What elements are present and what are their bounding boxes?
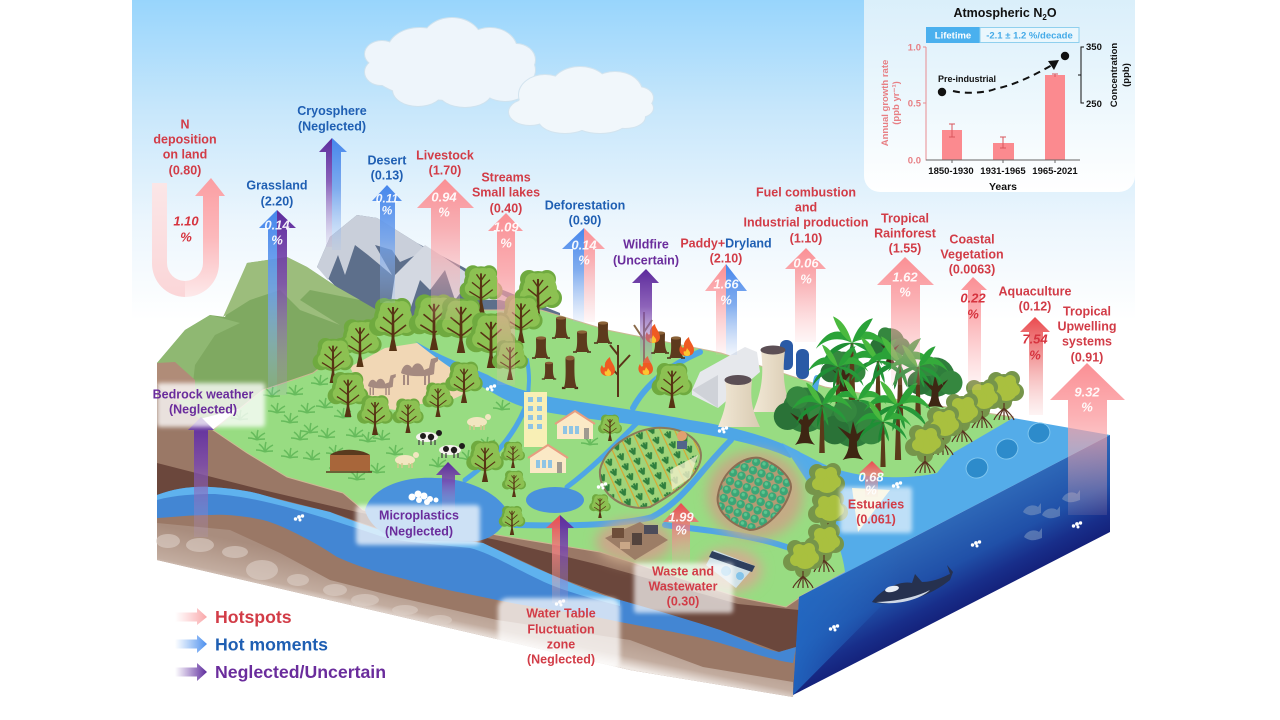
label: streams small lakes: Streams xyxy=(481,170,531,184)
pond large xyxy=(365,478,508,542)
percent: streams: % xyxy=(500,236,512,250)
buildings xyxy=(524,392,595,473)
label: tropical upwelling systems: Upwelling xyxy=(1057,320,1117,334)
label: tropical rainforest xyxy=(874,212,937,256)
percent: grassland: 0.14 xyxy=(264,218,290,232)
legend text: hot moments: Hot moments xyxy=(215,634,328,654)
label: estuaries: (0.061) xyxy=(856,512,896,526)
arrow: grassland xyxy=(259,210,296,395)
farm field paddy xyxy=(600,428,701,508)
percent: upwelling: % xyxy=(1081,400,1093,414)
left axis: 0.5 xyxy=(908,98,922,110)
percent: desert xyxy=(376,192,399,218)
percent: streams: 1.09 xyxy=(493,220,519,234)
label: water table: (Neglected) xyxy=(527,652,595,666)
label: waste and wastewater: (0.30) xyxy=(667,594,699,608)
fish school xyxy=(1023,490,1080,540)
label: bedrock weather: (Neglected) xyxy=(169,402,237,416)
label: paddy and dryland: (2.10) xyxy=(710,252,742,266)
earth cross-section xyxy=(156,385,799,697)
label: N deposition on land: on land xyxy=(163,148,207,162)
percent: desert: 0.11 xyxy=(376,192,399,206)
label: waste and wastewater: Wastewater xyxy=(648,580,718,594)
percent: coastal: % xyxy=(967,306,979,322)
label: paddy and dryland xyxy=(680,236,772,266)
arrow: tropical upwelling xyxy=(1050,363,1125,515)
arrow: bedrock weathering xyxy=(188,417,214,537)
sky background xyxy=(132,0,1135,320)
percent: deforestation: % xyxy=(578,252,590,268)
label: wildfire: (Uncertain) xyxy=(613,254,679,268)
label: aquaculture xyxy=(999,284,1072,314)
microplastics xyxy=(408,490,438,505)
lifetime box: -2.1 ± 1.2 %/decade xyxy=(986,30,1073,42)
year labels xyxy=(928,166,1078,193)
arrow: wildfire xyxy=(632,269,659,363)
arrow: deforestation xyxy=(562,228,605,322)
chart title: 2 xyxy=(1042,13,1047,22)
mangroves coast xyxy=(783,463,848,588)
farm field dryland xyxy=(707,451,803,539)
dark soil band xyxy=(157,463,799,652)
label: coastal vegetation: Vegetation xyxy=(940,248,1004,262)
percent: N deposition: 1.10 xyxy=(173,214,199,228)
label: deforestation: (0.90) xyxy=(569,214,601,228)
percent: estuaries: 0.68 xyxy=(858,470,884,484)
percent: rainforest: 1.62 xyxy=(892,270,918,284)
right axis: 350 xyxy=(1086,42,1102,53)
land surface xyxy=(213,310,1013,607)
main river xyxy=(415,341,800,458)
percent: upwelling xyxy=(1074,384,1100,414)
percent: aquaculture xyxy=(1022,332,1048,362)
label: N deposition on land: (0.80) xyxy=(169,164,201,178)
farm animals xyxy=(395,414,491,468)
arrow: water table xyxy=(546,515,574,603)
coastal water surface xyxy=(782,418,1110,597)
arrow: N deposition xyxy=(152,178,225,297)
lifetime box xyxy=(926,27,1079,43)
percent: rainforest xyxy=(892,270,918,300)
percent: estuaries: % xyxy=(865,482,877,498)
label: livestock xyxy=(416,148,474,178)
gravel bed xyxy=(157,523,793,697)
label: fuel combustion: Fuel combustion xyxy=(756,186,856,200)
percent: deforestation xyxy=(571,238,597,268)
gravel stones xyxy=(156,534,452,625)
cloud left xyxy=(365,18,535,107)
label: livestock: Livestock xyxy=(416,148,474,162)
N2O molecules xyxy=(294,384,1082,632)
percent: rainforest: % xyxy=(899,284,911,300)
left axis: (ppb yr⁻¹) xyxy=(891,81,902,125)
snow mountain xyxy=(317,215,560,340)
left axis: Annual growth rate xyxy=(880,60,891,146)
arrow: estuaries xyxy=(859,461,884,497)
percent: grassland xyxy=(264,218,290,248)
label: coastal vegetation: (0.0063) xyxy=(949,262,995,276)
label: N deposition on land xyxy=(153,118,217,178)
arrow: cryosphere xyxy=(319,138,347,250)
label: tropical rainforest: Tropical xyxy=(881,212,929,226)
percent: N deposition: % xyxy=(180,230,192,244)
arrow: aquaculture xyxy=(1020,317,1050,415)
green hills xyxy=(157,257,400,430)
groundwater highlight xyxy=(157,487,620,606)
label: streams small lakes: (0.40) xyxy=(490,202,522,216)
storage tanks xyxy=(780,340,809,379)
lifetime box: Lifetime xyxy=(935,30,971,42)
left axis xyxy=(880,42,1080,166)
mangroves shore xyxy=(905,371,1024,473)
percent: waste xyxy=(668,510,694,538)
power plant xyxy=(692,340,809,427)
arrow: microplastics xyxy=(436,462,461,510)
cooling tower large xyxy=(753,350,792,412)
legend arrow: hot moments xyxy=(175,635,207,653)
label: grassland: (2.20) xyxy=(261,194,293,208)
right axis xyxy=(1078,42,1132,110)
arrow: livestock xyxy=(417,179,474,320)
arrow: waste and wastewater xyxy=(663,503,699,567)
concentration trend xyxy=(938,52,1069,96)
right axis: Concentration xyxy=(1109,43,1120,107)
label: paddy and dryland: Paddy+Dryland xyxy=(680,236,772,250)
label: desert: (0.13) xyxy=(371,168,403,182)
label: livestock: (1.70) xyxy=(429,164,461,178)
year labels: 1965-2021 xyxy=(1032,166,1078,177)
label: fuel combustion: and xyxy=(795,200,817,214)
arrow: fuel combustion xyxy=(785,248,826,342)
label: grassland xyxy=(246,178,308,208)
percentages on arrows xyxy=(173,190,1100,538)
label: bedrock weather xyxy=(153,388,254,416)
label: tropical upwelling systems: (0.91) xyxy=(1071,350,1103,364)
year labels: Years xyxy=(989,181,1017,193)
label: aquaculture: (0.12) xyxy=(1019,300,1051,314)
soil base xyxy=(157,385,799,697)
percent: waste: 1.99 xyxy=(668,510,694,524)
arrow: coastal vegetation xyxy=(961,277,987,390)
label: aquaculture: Aquaculture xyxy=(999,284,1072,298)
chart title: Atmospheric N xyxy=(953,6,1042,20)
percent: paddy: % xyxy=(720,292,732,308)
label: estuaries xyxy=(848,498,904,526)
concentration trend: Pre-industrial xyxy=(938,74,996,84)
wastewater treatment plant xyxy=(698,548,762,592)
legend text: hotspots: Hotspots xyxy=(215,607,292,627)
label: water table: zone xyxy=(547,638,575,652)
label: N deposition on land: deposition xyxy=(153,132,217,146)
label backing panels xyxy=(157,383,912,670)
arrow: paddy and dryland xyxy=(705,264,747,355)
percent: streams xyxy=(493,220,519,250)
legend arrow: hotspots xyxy=(175,608,207,625)
compost pile xyxy=(326,450,372,472)
arrow: tropical rainforest xyxy=(877,257,934,385)
percent: fuel: % xyxy=(800,272,812,286)
label: desert: Desert xyxy=(368,154,407,168)
percent: aquaculture: 7.54 xyxy=(1022,332,1048,346)
legend xyxy=(175,607,386,682)
label: tropical upwelling systems: systems xyxy=(1062,334,1112,348)
percent: livestock: 0.94 xyxy=(431,190,457,204)
label: tropical rainforest: Rainforest xyxy=(874,226,937,240)
label: tropical upwelling systems xyxy=(1057,304,1117,364)
percent: paddy: 1.66 xyxy=(713,276,739,292)
percent: coastal: 0.22 xyxy=(960,290,986,306)
label: cryosphere xyxy=(297,104,367,134)
percent: desert: % xyxy=(382,204,393,218)
label: grassland: Grassland xyxy=(246,178,308,192)
percent: coastal xyxy=(960,290,986,322)
left axis: 1.0 xyxy=(908,42,921,54)
label: deforestation xyxy=(545,198,625,228)
groundwater band xyxy=(157,487,796,663)
percent: livestock xyxy=(431,190,457,220)
left axis: 0.0 xyxy=(908,156,921,166)
waste plant xyxy=(596,520,672,564)
label: deforestation: Deforestation xyxy=(545,198,625,212)
percent: grassland: % xyxy=(271,232,283,248)
label: tropical rainforest: (1.55) xyxy=(889,242,921,256)
cooling tower small xyxy=(718,380,760,427)
label: microplastics: Microplastics xyxy=(379,508,459,522)
label: microplastics: (Neglected) xyxy=(385,524,453,538)
label: water table xyxy=(526,606,596,666)
label: streams small lakes xyxy=(472,170,540,216)
right axis: (ppb) xyxy=(1121,63,1132,87)
label: fuel combustion: (1.10) xyxy=(790,232,822,246)
orca xyxy=(872,565,953,603)
aquaculture ponds xyxy=(963,420,1053,481)
label: waste and wastewater: Waste and xyxy=(652,564,714,578)
desert sand patch xyxy=(350,343,470,410)
grass tufts xyxy=(231,375,598,480)
label: fuel combustion xyxy=(744,186,868,246)
label: tropical upwelling systems: Tropical xyxy=(1063,304,1111,318)
rivers and ponds xyxy=(365,341,822,550)
label: N deposition on land: N xyxy=(180,118,190,132)
ocean front face xyxy=(793,435,1110,695)
pond small xyxy=(526,487,584,513)
legend text: neglected: Neglected/Uncertain xyxy=(215,662,386,682)
wildfire dead trees xyxy=(606,312,652,397)
percent: upwelling: 9.32 xyxy=(1074,384,1100,400)
wildfire flames xyxy=(600,324,694,376)
label: wildfire: Wildfire xyxy=(623,238,669,252)
deciduous trees xyxy=(313,265,692,535)
label: fuel combustion: Industrial production xyxy=(744,216,868,230)
chart panel: atmospheric N2O xyxy=(864,0,1135,193)
tropical rainforest xyxy=(774,316,962,467)
arrow: streams and small lakes xyxy=(488,213,523,385)
percent: fuel: 0.06 xyxy=(793,256,819,270)
year labels: 1850-1930 xyxy=(928,166,974,177)
chart title: O xyxy=(1047,6,1057,20)
label: bedrock weather: Bedrock weather xyxy=(153,388,254,402)
label: waste and wastewater xyxy=(648,564,718,608)
label: desert xyxy=(368,154,407,182)
label: coastal vegetation xyxy=(940,232,1004,276)
percent: deforestation: 0.14 xyxy=(571,238,597,252)
year labels: 1931-1965 xyxy=(980,166,1026,177)
label: streams small lakes: Small lakes xyxy=(472,186,540,200)
percent: waste: % xyxy=(675,522,687,538)
percent: N deposition xyxy=(173,214,199,244)
percent: fuel xyxy=(793,256,819,286)
label: cryosphere: (Neglected) xyxy=(298,120,366,134)
percent: paddy xyxy=(713,276,739,308)
legend arrow: neglected xyxy=(175,663,207,681)
label: estuaries: Estuaries xyxy=(848,498,904,512)
percent: estuaries xyxy=(858,470,884,498)
label: coastal vegetation: Coastal xyxy=(949,232,995,246)
label: wildfire xyxy=(613,238,679,268)
deforestation stumps xyxy=(532,316,685,388)
percent: livestock: % xyxy=(438,204,450,220)
label: cryosphere: Cryosphere xyxy=(297,104,367,118)
cloud right xyxy=(509,67,653,133)
percent: aquaculture: % xyxy=(1029,348,1041,362)
label: microplastics xyxy=(379,508,459,538)
right axis: 250 xyxy=(1086,99,1102,110)
camels xyxy=(368,357,438,395)
bars xyxy=(942,74,1065,160)
label: water table: Water Table xyxy=(526,606,596,620)
estuary sand xyxy=(852,488,890,532)
label: water table: Fluctuation xyxy=(527,622,595,636)
arrow: desert xyxy=(372,185,402,303)
